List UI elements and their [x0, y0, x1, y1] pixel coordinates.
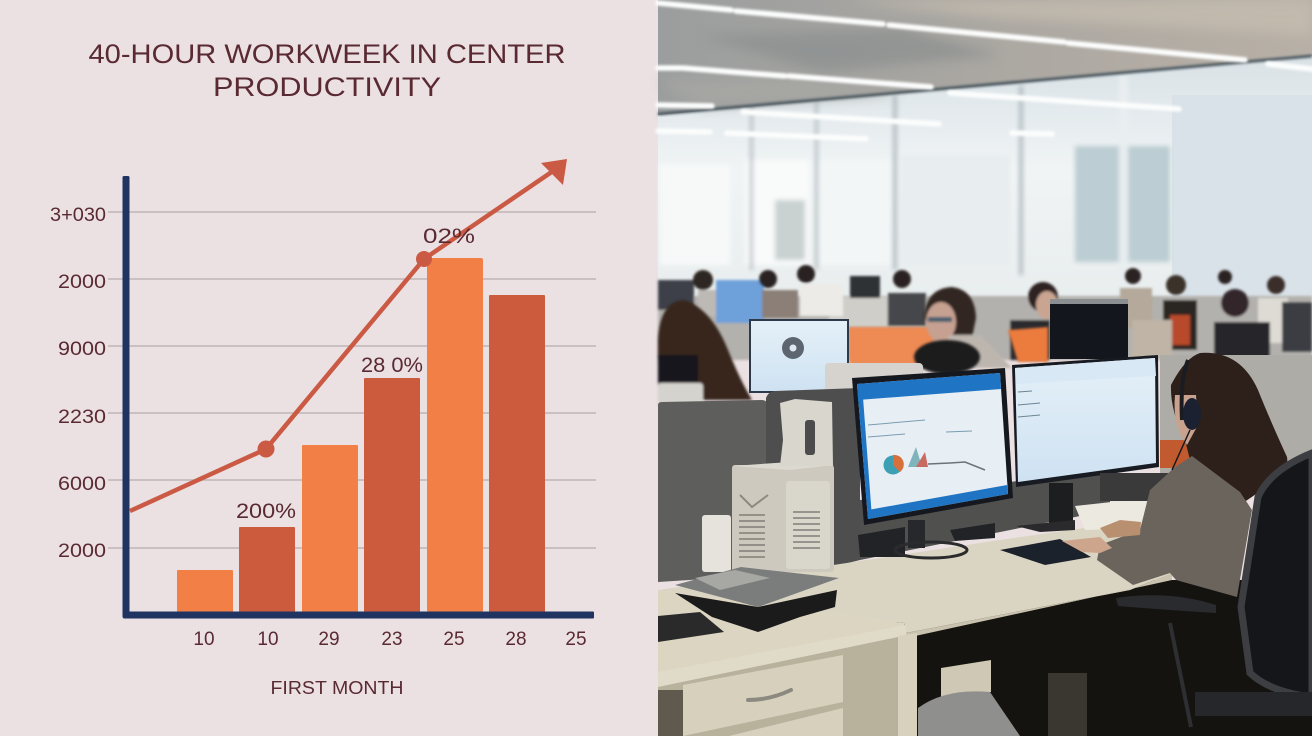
x-axis labels: 25 [443, 629, 465, 650]
x-axis labels: 23 [381, 629, 403, 650]
ceiling lights [658, 3, 1312, 139]
monitor stands and cables [858, 473, 1168, 558]
office wall and glass [658, 0, 1312, 340]
mini chart on screen [884, 447, 985, 474]
bar chart [50, 159, 596, 698]
y-axis labels [50, 205, 106, 562]
paper roll [702, 515, 731, 572]
orange panel [849, 327, 1048, 365]
man with glasses [924, 287, 1012, 368]
ceiling [658, 0, 1312, 115]
x-axis labels [193, 629, 587, 650]
title: PRODUCTIVITY [213, 72, 441, 102]
desk [658, 497, 1175, 736]
y-axis labels: 3+030 [50, 205, 106, 226]
gray item under desk [918, 691, 1020, 736]
axes [122, 176, 594, 618]
x-axis labels: 25 [565, 629, 587, 650]
x-axis labels: 10 [193, 629, 215, 650]
bars [177, 258, 545, 612]
y-axis labels: 9000 [58, 339, 106, 360]
head in front of monitors [914, 340, 980, 374]
woman foreground-left [658, 300, 752, 407]
y-axis labels: 2000 [58, 541, 106, 562]
trend arrow [130, 159, 567, 511]
x-axis labels: 29 [318, 629, 340, 650]
x-axis title: FIRST MONTH [270, 678, 404, 698]
drawer unit [658, 637, 898, 736]
monitor right [1012, 355, 1159, 487]
title [88, 39, 566, 102]
data labels [236, 225, 475, 523]
y-axis labels: 2230 [58, 407, 106, 428]
keyboard [1000, 539, 1091, 565]
woman with headset [1062, 353, 1287, 597]
y-axis labels: 6000 [58, 474, 106, 495]
pc tower [732, 399, 834, 572]
under-desk shadow [896, 580, 1312, 736]
y-axis labels: 2000 [58, 272, 106, 293]
title: 40-HOUR WORKWEEK IN CENTER [88, 39, 566, 69]
background workers [658, 265, 1312, 360]
data labels: 02% [423, 225, 475, 248]
office chair [1116, 453, 1312, 727]
data labels: 28 0% [361, 354, 423, 377]
data labels: 200% [236, 500, 296, 523]
partitions [658, 355, 1312, 582]
panel: chart background [0, 0, 658, 736]
photo: call center office [658, 0, 1312, 736]
monitor with donut [749, 319, 849, 393]
dark monitor rear [1050, 299, 1128, 359]
x-axis labels: 10 [257, 629, 279, 650]
monitor left with chart [852, 368, 1013, 525]
bag on desk [658, 567, 839, 642]
x-axis labels: 28 [505, 629, 527, 650]
